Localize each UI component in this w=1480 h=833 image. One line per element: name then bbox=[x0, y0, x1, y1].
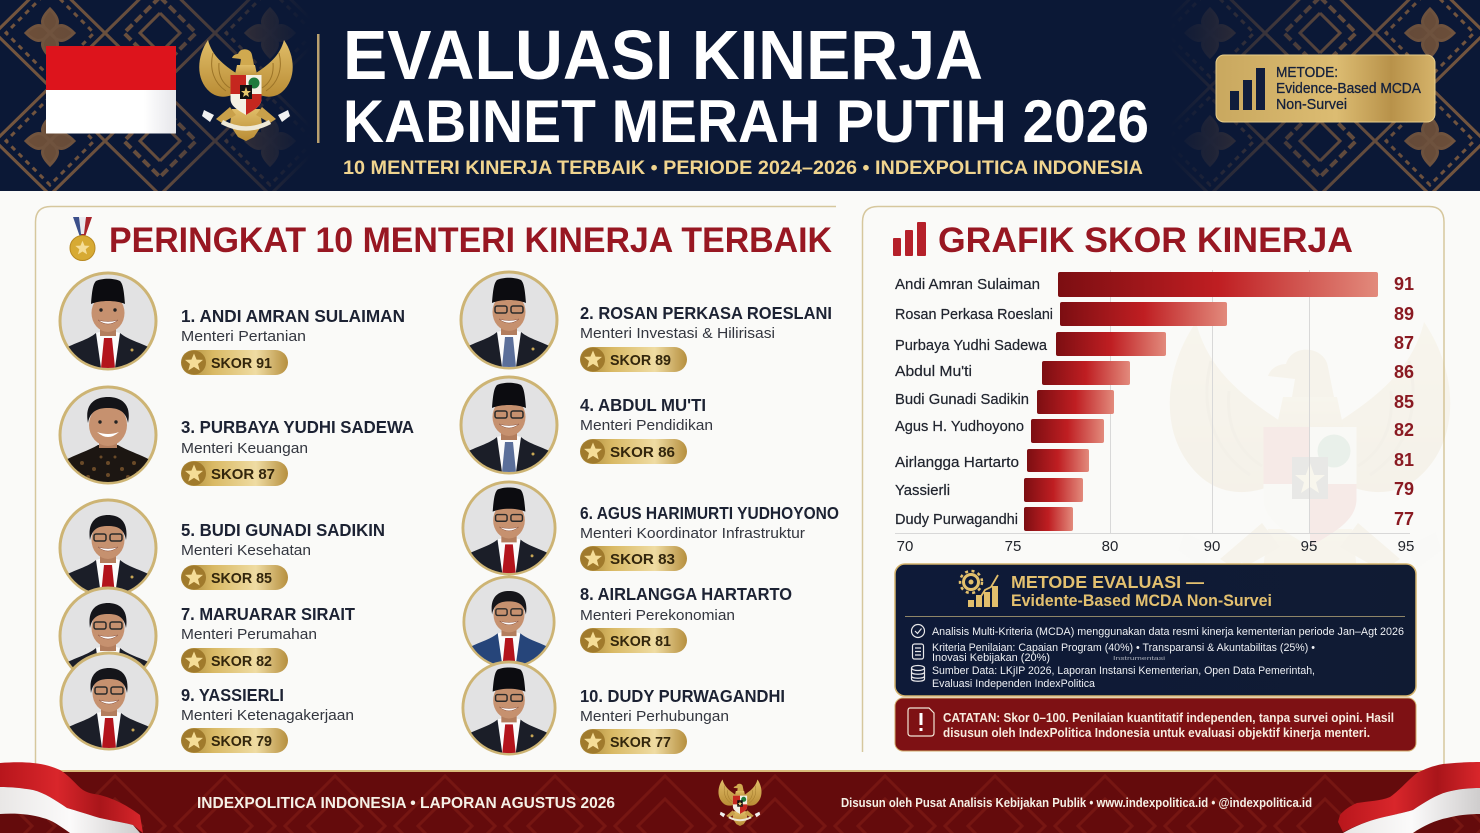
minister 3 bbox=[60, 387, 414, 486]
footer right text: Disusun oleh Pusat Analisis Kebijakan Publik • www.indexpolitica.id • @indexpolitica.id bbox=[841, 796, 1312, 810]
minister 1: 1. ANDI AMRAN SULAIMAN bbox=[181, 306, 405, 326]
portrait: Purbaya Yudhi Sadewa bbox=[60, 387, 156, 483]
method heading: Evidente-Based MCDA Non-Survei bbox=[1011, 592, 1272, 610]
axis labels: 70 bbox=[897, 538, 913, 555]
score badge: SKOR 82 bbox=[211, 653, 272, 670]
method heading bbox=[1011, 572, 1272, 610]
bar values: 87 bbox=[1394, 333, 1414, 353]
bar values bbox=[1394, 274, 1414, 529]
minister 3: 3. PURBAYA YUDHI SADEWA bbox=[181, 417, 414, 437]
minister 6 bbox=[463, 482, 839, 574]
axis labels: 95 bbox=[1398, 538, 1414, 555]
axis labels: 95 bbox=[1301, 538, 1317, 555]
portrait: Dudy Purwagandhi bbox=[463, 662, 555, 754]
minister 8: Menteri Perekonomian bbox=[580, 607, 735, 624]
minister 1 bbox=[60, 273, 405, 375]
minister 10: Menteri Perhubungan bbox=[580, 708, 729, 725]
score badge: SKOR 81 bbox=[610, 633, 671, 650]
bars bbox=[1024, 272, 1378, 531]
bar names: Purbaya Yudhi Sadewa bbox=[895, 337, 1048, 354]
axis labels: 75 bbox=[1005, 538, 1021, 555]
icon: check bbox=[912, 624, 924, 638]
minister 9: Menteri Ketenagakerjaan bbox=[181, 707, 354, 724]
bar values: 77 bbox=[1394, 509, 1414, 529]
bar names: Agus H. Yudhoyono bbox=[895, 418, 1024, 435]
method text: Sumber Data: LKjIP 2026, Laporan Instansi Kementerian, Open Data Pemerintah, bbox=[932, 665, 1315, 677]
minister 6: Menteri Koordinator Infrastruktur bbox=[580, 525, 805, 542]
footer left text: INDEXPOLITICA INDONESIA • LAPORAN AGUSTUS 2026 bbox=[197, 795, 615, 812]
score badge: SKOR 79 bbox=[211, 733, 272, 750]
minister 9: 9. YASSIERLI bbox=[181, 685, 284, 705]
minister 8 bbox=[464, 577, 792, 667]
bar values: 86 bbox=[1394, 362, 1414, 382]
header band bbox=[0, 0, 1480, 191]
score badge bbox=[181, 565, 288, 590]
score badge bbox=[181, 461, 288, 486]
axis labels: 90 bbox=[1204, 538, 1220, 555]
bar values: 82 bbox=[1394, 420, 1414, 440]
score badge bbox=[181, 728, 288, 753]
bar names: Rosan Perkasa Roeslani bbox=[895, 306, 1053, 323]
score badge bbox=[580, 347, 687, 372]
minister 5 bbox=[60, 500, 385, 596]
minister 2: Menteri Investasi & Hilirisasi bbox=[580, 325, 775, 342]
score badge: SKOR 77 bbox=[610, 734, 671, 751]
footer band bbox=[0, 762, 1480, 833]
bar names: Andi Amran Sulaiman bbox=[895, 276, 1040, 293]
portrait: Budi Gunadi Sadikin bbox=[60, 500, 156, 596]
bar values: 85 bbox=[1394, 392, 1414, 412]
icon: gear and chart bbox=[960, 571, 998, 607]
icon: document bbox=[912, 644, 924, 659]
method text: Inovasi Kebijakan (20%) bbox=[932, 652, 1050, 664]
icon: footer Garuda bbox=[718, 780, 762, 826]
bar values: 91 bbox=[1394, 274, 1414, 294]
minister 2: 2. ROSAN PERKASA ROESLANI bbox=[580, 303, 832, 323]
icon: right waving flag bbox=[1338, 762, 1480, 833]
score badge: SKOR 87 bbox=[211, 466, 275, 483]
minister 10: 10. DUDY PURWAGANDHI bbox=[580, 686, 785, 706]
score badge: SKOR 86 bbox=[610, 444, 675, 461]
panel: ranking outline bbox=[36, 206, 836, 765]
method badge: METODE: bbox=[1276, 65, 1338, 81]
heading: chart: GRAFIK SKOR KINERJA bbox=[938, 221, 1353, 260]
watermark: Garuda bbox=[1170, 322, 1450, 625]
note text bbox=[943, 710, 1394, 740]
page background bbox=[0, 191, 1480, 771]
score badge bbox=[580, 439, 687, 464]
axis labels: 80 bbox=[1102, 538, 1118, 555]
minister 2 bbox=[461, 272, 832, 372]
title bbox=[343, 16, 1149, 155]
bar names: Yassierli bbox=[895, 482, 950, 499]
callout: note bbox=[895, 698, 1416, 751]
icon: database bbox=[912, 666, 924, 681]
score badge bbox=[580, 729, 687, 754]
minister 5: 5. BUDI GUNADI SADIKIN bbox=[181, 520, 385, 540]
icon: chart heading bars bbox=[893, 222, 926, 256]
bar values: 89 bbox=[1394, 304, 1414, 324]
portrait: Abdul Mu'ti bbox=[461, 377, 557, 473]
score badge bbox=[181, 648, 288, 673]
minister 4: 4. ABDUL MU'TI bbox=[580, 395, 706, 415]
method text: Kriteria Penilaian: Capaian Program (40%) • Transparansi & Akuntabilitas (25%) • bbox=[932, 642, 1315, 654]
bar values: 81 bbox=[1394, 450, 1414, 470]
score badge: SKOR 85 bbox=[211, 570, 272, 587]
score badge: SKOR 89 bbox=[610, 352, 671, 369]
title: EVALUASI KINERJA bbox=[343, 16, 983, 94]
portrait: Airlangga Hartarto bbox=[464, 577, 554, 667]
method text: Evaluasi Independen IndexPolitica bbox=[932, 678, 1096, 690]
portrait: Andi Amran Sulaiman bbox=[60, 273, 156, 369]
icon: left waving flag bbox=[0, 762, 143, 833]
score badge bbox=[580, 628, 687, 653]
score badge bbox=[580, 546, 687, 571]
minister 5: Menteri Kesehatan bbox=[181, 542, 311, 559]
note text: disusun oleh IndexPolitica Indonesia untuk evaluasi objektif kinerja menteri. bbox=[943, 725, 1370, 740]
minister 6: 6. AGUS HARIMURTI YUDHOYONO bbox=[580, 503, 839, 523]
portrait: Yassierli bbox=[61, 653, 157, 749]
portrait: Rosan Perkasa Roeslani bbox=[461, 272, 557, 368]
icon: Garuda emblem bbox=[199, 40, 293, 141]
minister 7 bbox=[60, 588, 355, 684]
minister 1: Menteri Pertanian bbox=[181, 328, 306, 345]
title: KABINET MERAH PUTIH 2026 bbox=[343, 88, 1149, 155]
minister 4: Menteri Pendidikan bbox=[580, 417, 713, 434]
bar chart bbox=[895, 270, 1414, 555]
score badge: SKOR 91 bbox=[211, 355, 272, 372]
method heading: METODE EVALUASI — bbox=[1011, 572, 1204, 592]
score badge bbox=[181, 350, 288, 375]
portrait: Maruarar Sirait bbox=[60, 588, 156, 684]
bar values: 79 bbox=[1394, 479, 1414, 499]
header divider bbox=[317, 34, 320, 143]
score badge: SKOR 83 bbox=[610, 551, 675, 568]
icon: alert bbox=[908, 708, 934, 736]
minister 8: 8. AIRLANGGA HARTARTO bbox=[580, 584, 792, 604]
minister 7: Menteri Perumahan bbox=[181, 626, 317, 643]
method text: Analisis Multi-Kriteria (MCDA) menggunakan data resmi kinerja kementerian periode Jan–Agt 2026 bbox=[932, 626, 1404, 638]
method badge: Non-Survei bbox=[1276, 97, 1347, 113]
method badge: Evidence-Based MCDA bbox=[1276, 81, 1421, 97]
bar names: Abdul Mu'ti bbox=[895, 363, 972, 380]
bar names: Airlangga Hartarto bbox=[895, 454, 1019, 471]
bar names bbox=[895, 276, 1053, 528]
minister 10 bbox=[463, 662, 785, 754]
note text: CATATAN: Skor 0–100. Penilaian kuantitatif independen, tanpa survei opini. Hasil bbox=[943, 710, 1394, 725]
minister 9 bbox=[61, 653, 354, 753]
axis labels bbox=[897, 538, 1414, 555]
method badge bbox=[1216, 55, 1435, 122]
minister 4 bbox=[461, 377, 713, 473]
method text bbox=[932, 626, 1404, 690]
bar names: Budi Gunadi Sadikin bbox=[895, 391, 1029, 408]
subtitle: 10 MENTERI KINERJA TERBAIK • PERIODE 2024–2026 • INDEXPOLITICA INDONESIA bbox=[343, 158, 1143, 179]
method text: Instrumentasi bbox=[1113, 656, 1165, 662]
minister 7: 7. MARUARAR SIRAIT bbox=[181, 604, 355, 624]
portrait: Agus Harimurti Yudhoyono bbox=[463, 482, 555, 574]
heading: ranking: PERINGKAT 10 MENTERI KINERJA TERBAIK bbox=[109, 221, 832, 260]
bar names: Dudy Purwagandhi bbox=[895, 511, 1018, 528]
panel: chart outline bbox=[862, 206, 1444, 765]
icon: medal bbox=[70, 217, 95, 260]
minister 3: Menteri Keuangan bbox=[181, 440, 308, 457]
panel: evaluation method bbox=[895, 564, 1416, 696]
icon: Indonesian flag bbox=[46, 46, 176, 134]
